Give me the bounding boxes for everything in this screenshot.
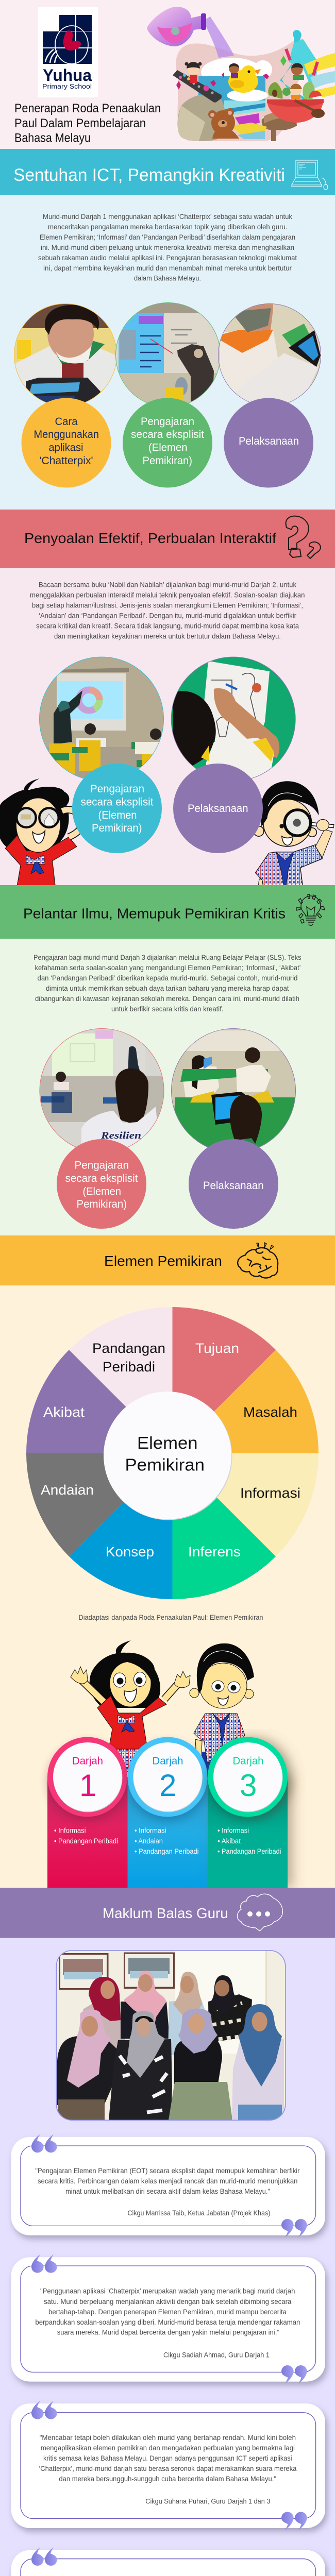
panel: Pelantar Ilmu	[0, 885, 335, 1235]
body text: bagi setiap halaman/ilustrasi. Jenis-jenis soalan merangkumi Elemen Pemikiran; ‘Informasi’,	[32, 601, 303, 609]
step: pengajaran eksplisit: Pemikiran)	[76, 1198, 127, 1210]
body text: Elemen Pemikiran; ‘Informasi’ dan ‘Pandangan Peribadi’ diserlahkan dalam pengajaran	[40, 233, 295, 241]
illustration: boy with magnifier	[255, 781, 334, 885]
photo: class at projected text: Resilien	[100, 1130, 141, 1141]
body text	[30, 580, 305, 640]
step: pengajaran eksplisit: Pengajaran	[141, 416, 194, 428]
logo: Yuhua Primary School: Yuhua	[43, 66, 92, 84]
wheel centre	[104, 1392, 232, 1520]
wedge: Masalah: Masalah	[243, 1404, 297, 1420]
quote 2: suara mereka. Murid dapat bercerita dengan yakin melalui pengajaran ini.”	[57, 2328, 279, 2336]
step: pelaksanaan: Pelaksanaan	[203, 1180, 264, 1192]
column: Darjah 3: • Pandangan Peribadi	[217, 1848, 281, 1855]
chart: wheel of thinking elements	[26, 1307, 319, 1599]
column: Darjah 2	[128, 1737, 208, 1888]
body text: untuk berfikir secara kritis dan kreatif.	[111, 1005, 224, 1013]
body text: secara kritikal dan kreatif. Secara tidak langsung, murid-murid dapat membina kosa kata	[36, 621, 299, 630]
column: Darjah 1: 1	[79, 1768, 96, 1803]
wedge: Informasi: Informasi	[240, 1485, 300, 1501]
quote 2	[11, 2255, 325, 2384]
photo: group of teachers	[56, 1950, 286, 2122]
column: Darjah 1: • Pandangan Peribadi	[54, 1837, 118, 1845]
step: pengajaran eksplisit: (Elemen	[82, 1185, 121, 1197]
wedge: Konsep	[69, 1453, 172, 1599]
wedge: Informasi	[172, 1453, 319, 1556]
quote 1: secara kritis. Perbincangan dalam kelas menjadi rancak dan murid-murid menunjukkan	[38, 2177, 297, 2185]
step: pengajaran eksplisit: secara eksplisit	[65, 1173, 138, 1184]
icon: light bulb	[296, 894, 325, 925]
title	[14, 101, 161, 145]
column: Darjah 1	[47, 1737, 128, 1888]
column: Darjah 3: Darjah	[233, 1755, 264, 1767]
quote 2: satu. Murid berpeluang menjalankan aktiviti dengan baik setelah dibimbing secara	[44, 2297, 292, 2306]
wedge: Inferens	[172, 1453, 276, 1599]
icon: laptop	[292, 160, 328, 190]
steps: caption circles	[72, 764, 263, 853]
body text: diminta untuk memikirkan sebuah daya tarikan baharu yang mereka harap dapat	[46, 984, 289, 992]
step: pengajaran eksplisit: secara eksplisit	[80, 796, 154, 808]
column: Darjah 2: • Informasi	[135, 1827, 166, 1835]
section band	[0, 1888, 335, 1938]
step: pengajaran eksplisit	[123, 398, 212, 487]
section band: Elemen Pemikiran	[104, 1253, 222, 1269]
quote 2: berpandukan soalan-soalan yang diberi. Murid-murid berasa teruja mendengar rakaman	[35, 2318, 300, 2326]
column: Darjah 3	[208, 1737, 288, 1888]
body text	[34, 953, 301, 1013]
step: pengajaran eksplisit	[57, 1139, 146, 1229]
wheel centre: Elemen	[137, 1433, 198, 1452]
logo: Yuhua Primary School: Primary School	[42, 82, 92, 90]
step: pengajaran eksplisit: Pengajaran	[74, 1160, 129, 1172]
icon: speech cloud	[237, 1894, 282, 1931]
quote 3: "Mencabar tetapi boleh dilakukan oleh murid yang bertahap rendah. Murid kini boleh	[40, 2433, 296, 2442]
panel: Sentuhan ICT	[0, 149, 335, 510]
quote 3: ‘Chatterpix’, murid-murid darjah satu berasa seronok dapat merakamkan suara mereka	[39, 2464, 296, 2472]
section band: Sentuhan ICT, Pemangkin Kreativiti	[13, 165, 285, 185]
step: pengajaran eksplisit: Pemikiran)	[92, 822, 142, 834]
body text: ini, dapat membina keyakinan murid dan menambah minat mereka untuk bertutur	[43, 264, 292, 272]
step: pengajaran eksplisit: (Elemen	[98, 809, 137, 821]
quote 4	[11, 2547, 325, 2576]
title: Paul Dalam Pembelajaran	[14, 116, 146, 130]
quote 1: "Pengajaran Elemen Pemikiran (EOT) secara eksplisit dapat memupuk kemahiran berfikir	[35, 2166, 300, 2175]
quote 3	[11, 2401, 325, 2530]
column: Darjah 2: Darjah	[153, 1755, 183, 1767]
step: pengajaran eksplisit: secara eksplisit	[131, 429, 204, 440]
title: Bahasa Melayu	[14, 131, 91, 145]
body text: dalam Bahasa Melayu.	[134, 274, 201, 282]
body text: Pengajaran bagi murid-murid Darjah 3 dijalankan melalui Ruang Belajar Pelajar (SLS). Teks	[34, 953, 301, 961]
section band: Maklum Balas Guru	[103, 1905, 228, 1921]
step: pelaksanaan	[173, 764, 263, 853]
quote 1: minat untuk melibatkan diri secara aktif dalam kelas Bahasa Melayu."	[65, 2187, 270, 2195]
step: cara menggunakan: Menggunakan	[34, 429, 99, 440]
icon: question marks	[286, 516, 321, 558]
step: pelaksanaan: Pelaksanaan	[188, 803, 248, 815]
quote 2: Cikgu Sadiah Ahmad, Guru Darjah 1	[163, 2350, 270, 2359]
photo: student writing	[218, 303, 321, 409]
wedge: Akibat	[26, 1350, 172, 1453]
step: cara menggunakan: aplikasi	[48, 442, 83, 453]
quote 3: kritis semasa kelas Bahasa Melayu. Dengan adanya penggunaan ICT seperti aplikasi	[43, 2454, 292, 2462]
column: Darjah 2: • Pandangan Peribadi	[135, 1848, 199, 1855]
wedge: Masalah	[172, 1350, 319, 1453]
panel: Maklum Balas Guru	[0, 1888, 335, 2576]
icon: brain	[238, 1243, 278, 1278]
wedge: Pandangan Peribadi: Peribadi	[103, 1359, 155, 1375]
photo: teacher at whiteboard	[115, 302, 221, 408]
quote 2: "Penggunaan aplikasi ‘Chatterpix’ merupakan wadah yang menarik bagi murid darjah	[40, 2287, 295, 2295]
wheel centre: Pemikiran	[125, 1455, 205, 1475]
column: Darjah 3: • Informasi	[217, 1827, 249, 1835]
logo: Yuhua Primary School	[38, 7, 98, 97]
body text: dibangunkan di kawasan kejiranan sekolah mereka. Dengan cara ini, murid-murid dilatih	[35, 994, 299, 1003]
step: pelaksanaan	[189, 1139, 278, 1229]
step: pelaksanaan: Pelaksanaan	[239, 435, 299, 447]
step: pengajaran eksplisit: Pemikiran)	[142, 455, 192, 467]
title: Penerapan Roda Penaakulan	[14, 101, 161, 115]
illustration: smiling boy	[190, 1643, 254, 1777]
step: cara menggunakan	[22, 398, 111, 487]
column: Darjah 3: 3	[240, 1768, 257, 1803]
body text: dan ‘Pandangan Peribadi’ diberikan kepada murid-murid. Sebagai contoh, murid-murid	[37, 974, 298, 982]
column: Darjah 3: • Akibat	[217, 1837, 241, 1845]
column: Darjah 1: • Informasi	[54, 1827, 86, 1835]
step: pengajaran eksplisit	[72, 764, 162, 853]
panel: Penyoalan Efektif	[0, 510, 335, 885]
photo: boy with tablet	[14, 303, 117, 407]
photo: teacher pointing at wheel	[39, 656, 164, 782]
step: pengajaran eksplisit: (Elemen	[148, 442, 188, 453]
panel: header	[0, 0, 335, 149]
section band	[0, 885, 335, 939]
quote 1	[11, 2134, 325, 2238]
wedge: Inferens: Inferens	[188, 1544, 241, 1560]
column: Darjah 1: Darjah	[72, 1755, 103, 1767]
step: cara menggunakan: 'Chatterpix'	[39, 455, 93, 467]
quote 3: mengaplikasikan elemen pemikiran dan mengadakan perbualan yang bermakna lagi	[41, 2444, 295, 2452]
section band: Penyoalan Efektif, Perbualan Interaktif	[24, 530, 276, 546]
body text: Bacaan bersama buku ‘Nabil dan Nabilah’ dijalankan bagi murid-murid Darjah 2, untuk	[39, 580, 297, 588]
wedge: Pandangan Peribadi	[69, 1307, 172, 1453]
body text: sebuah rakaman audio melalui aplikasi ini. Pengajaran berasaskan teknologi maklumat	[38, 253, 297, 262]
section band: Pelantar Ilmu, Memupuk Pemikiran Kritis	[23, 906, 286, 922]
wedge: Konsep: Konsep	[106, 1544, 154, 1560]
body text	[38, 212, 297, 282]
panel: Elemen Pemikiran	[0, 1235, 335, 1888]
section band	[0, 149, 335, 195]
column: Darjah 2: 2	[159, 1768, 176, 1803]
steps: caption circles	[22, 398, 313, 487]
quote 1: Cikgu Marrissa Taib, Ketua Jabatan (Projek Khas)	[128, 2209, 270, 2217]
quote 2: bertahap-tahap. Dengan penerapan Elemen Pemikiran, murid mampu bercerita	[48, 2308, 287, 2316]
wedge: Tujuan: Tujuan	[195, 1341, 239, 1356]
photo: students with tablets	[171, 1028, 296, 1154]
wedge: Andaian: Andaian	[41, 1482, 94, 1498]
step: pelaksanaan	[224, 398, 313, 487]
body text: kefahaman serta soalan-soalan yang mengandungi Elemen Pemikiran; ‘Informasi’, ‘Akibat’	[35, 963, 301, 972]
section band	[0, 1235, 335, 1285]
body text: ‘Andaian’ dan ‘Pandangan Peribadi’. Dengan itu, murid-murid digalakkan untuk berfikir	[39, 612, 296, 620]
body text: Murid-murid Darjah 1 menggunakan aplikasi ‘Chatterpix’ sebagai satu wadah untuk	[43, 212, 293, 221]
wedge: Tujuan	[172, 1307, 276, 1453]
section band	[0, 510, 335, 568]
photo: student colouring worksheet	[171, 656, 296, 783]
quote 3: dan mereka bersungguh-sungguh cuba bercerita dalam Bahasa Melayu."	[59, 2475, 276, 2483]
illustration: girl with glasses	[0, 778, 80, 885]
body text: ini. Murid-murid diberi peluang untuk meneroka kreativiti mereka dan menghasilkan	[41, 243, 294, 251]
illustration: potion and toys	[147, 7, 335, 141]
wedge: Akibat: Akibat	[43, 1404, 85, 1420]
column: Darjah 2: • Andaian	[135, 1837, 163, 1845]
step: pengajaran eksplisit: Pengajaran	[90, 783, 144, 795]
photo: class at projected text	[39, 1028, 164, 1154]
body text: menceritakan pengalaman mereka berdasarkan topik yang diberikan oleh guru.	[48, 223, 288, 231]
body text: menggalakkan perbualan interaktif melalui teknik penyoalan efektif. Soalan-soalan diajukan	[30, 591, 305, 599]
body text: dan meningkatkan keyakinan mereka untuk bertutur dalam Bahasa Melayu.	[54, 632, 281, 640]
wedge: Andaian	[26, 1453, 172, 1556]
step: cara menggunakan: Cara	[55, 416, 78, 428]
wedge: Pandangan Peribadi: Pandangan	[92, 1341, 165, 1356]
illustration: waving girl	[71, 1640, 190, 1774]
columns: grades	[47, 1737, 288, 1888]
caption: Diadaptasi daripada Roda Penaakulan Paul: Elemen Pemikiran	[78, 1614, 263, 1621]
quote 3: Cikgu Suhana Puhari, Guru Darjah 1 dan 3	[145, 2497, 271, 2505]
steps: caption circles	[57, 1139, 278, 1229]
